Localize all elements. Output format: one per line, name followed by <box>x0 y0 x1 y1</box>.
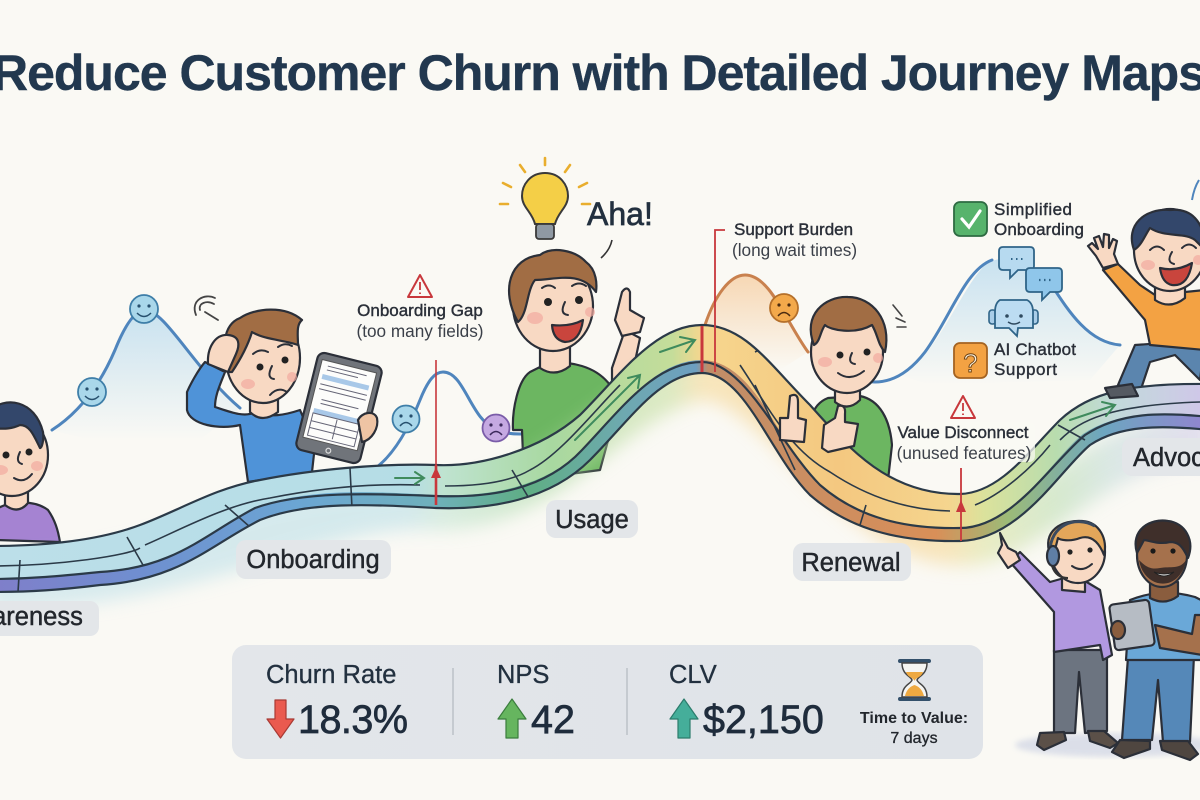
KPI: churn rate: Churn Rate <box>266 661 396 689</box>
stage label: Usage: Usage <box>555 506 629 534</box>
stage label: Advocacy <box>1122 438 1200 476</box>
icon: sad face <box>392 406 420 432</box>
colleague <box>1109 521 1200 760</box>
callout: onboarding gap: (too many fields) <box>356 321 484 341</box>
KPI: CLV: CLV <box>669 661 717 689</box>
icon: happy face low <box>78 378 106 406</box>
icon: hourglass <box>900 661 929 699</box>
ribbon lower band <box>0 342 1200 592</box>
character: confused onboarding user <box>187 296 383 482</box>
character: awareness customer <box>0 402 60 542</box>
icon: upset purple face <box>482 414 510 442</box>
journey ribbon <box>0 325 1200 610</box>
hand on tablet <box>358 413 377 442</box>
hand on head <box>208 335 238 372</box>
stage label: Usage <box>546 500 638 538</box>
emotion curve: support burden <box>705 275 808 370</box>
ribbon top face <box>0 325 1200 592</box>
icon: warning triangle <box>408 275 432 297</box>
KPI: CLV <box>669 661 824 742</box>
callout: value disconnect: Value Disconnect <box>897 423 1029 442</box>
advocate shoe <box>1105 384 1138 398</box>
waving hand <box>1088 234 1118 268</box>
icon: green check <box>954 202 987 236</box>
callout: value disconnect <box>893 396 1035 541</box>
icon: chat bubbles <box>999 247 1062 300</box>
KPI: churn rate: 18.3% <box>298 698 408 742</box>
Aha label <box>587 196 653 258</box>
KPI: NPS <box>497 661 575 742</box>
ribbon centre line and segment ticks <box>0 365 1200 566</box>
ribbon outlines <box>0 325 1200 546</box>
emotion curve: awareness to onboarding <box>52 295 240 440</box>
character: support agent and colleague <box>998 521 1200 760</box>
emotion curve: chatbot recovery <box>865 258 1120 385</box>
Aha label: Aha! <box>587 196 653 232</box>
icon: surprise ticks <box>893 305 906 327</box>
solution: AI chatbot support: AI Chatbot <box>994 340 1076 359</box>
character: renewal user <box>810 297 906 490</box>
solution: simplified onboarding: Onboarding <box>994 220 1084 239</box>
ribbon shadow <box>0 350 1200 610</box>
icon: confusion squiggle <box>195 296 218 320</box>
callout: onboarding gap: Onboarding Gap <box>357 301 483 320</box>
icon: chatbot <box>989 300 1038 336</box>
icon: light bulb <box>500 158 590 239</box>
icon: warning triangle <box>951 396 975 418</box>
KPI: time to value: 7 days <box>890 730 938 747</box>
icon: happy face peak <box>130 295 158 323</box>
thumbs-up hands <box>780 395 858 452</box>
stage label: Onboarding: Onboarding <box>246 546 380 574</box>
callout: support burden: Support Burden <box>734 220 853 239</box>
callout: value disconnect: (unused features) <box>897 443 1031 463</box>
KPI: CLV: $2,150 <box>703 698 824 742</box>
stage label: Renewal: Renewal <box>801 549 901 577</box>
icon: orange question: ? <box>963 348 978 378</box>
tablet with form <box>295 352 383 464</box>
solution: simplified onboarding: Simplified <box>994 200 1072 219</box>
character: celebrating advocate <box>1088 180 1200 392</box>
stage label: Onboarding <box>236 540 391 579</box>
KPI: NPS: 42 <box>531 698 575 742</box>
callout: support burden <box>702 220 857 372</box>
KPI: churn rate <box>266 661 408 742</box>
solution: AI chatbot support: Support <box>994 360 1057 379</box>
KPI: time to value <box>860 710 968 747</box>
KPI: time to value: Time to Value: <box>860 710 968 727</box>
KPI: NPS: NPS <box>497 661 549 689</box>
callout: support burden: (long wait times) <box>732 240 857 260</box>
ground shadow <box>1015 733 1200 757</box>
solution: simplified onboarding <box>954 200 1084 239</box>
icon: ribbon direction arrows <box>395 337 1115 484</box>
tablet <box>1109 599 1155 651</box>
KPI panel <box>232 645 983 759</box>
icon: orange sad face <box>770 294 798 322</box>
emotion curve: onboarding gap <box>373 372 570 470</box>
icon: motion tick <box>1192 180 1199 200</box>
solution: AI chatbot support <box>954 340 1076 379</box>
title: Reduce Customer Churn with Detailed Journey Maps <box>0 45 1200 101</box>
stage label: Awareness <box>0 601 99 636</box>
pointing hand <box>615 288 644 336</box>
character: happy usage user <box>509 250 644 480</box>
stage label: Renewal <box>793 543 911 581</box>
support agent <box>998 521 1118 750</box>
callout: onboarding gap <box>356 275 484 505</box>
